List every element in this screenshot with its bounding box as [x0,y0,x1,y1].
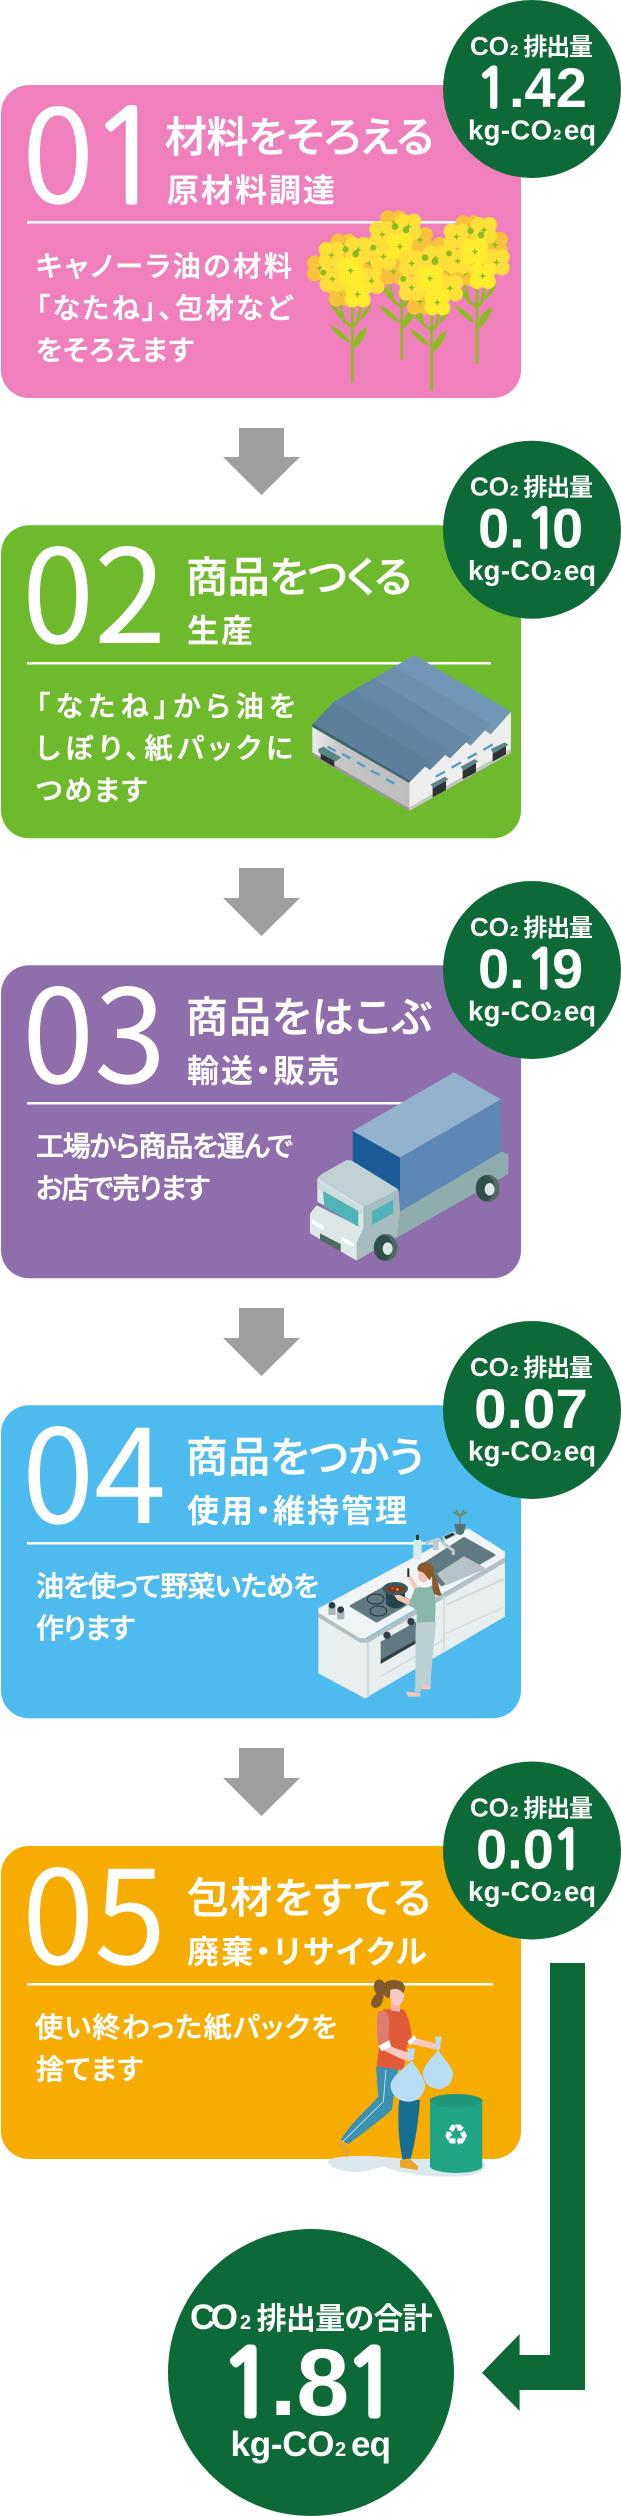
badge: step 05 CO2: CO [470,1792,509,1822]
text block: step 01: キャノーラ油の材料 [36,245,292,285]
heading: step 03: 商品をはこぶ [186,984,432,1045]
badge: step 04 CO2: 0.07 [474,1377,588,1440]
arrow: step 1 to 2 [223,428,300,495]
badge: step 02 CO2: CO [470,472,509,502]
badge: step 04 CO2: CO [470,1352,509,1382]
badge: step 03 CO2 [443,881,621,1059]
text block: step 04 [36,1565,319,1647]
number 01: 1 [88,92,167,222]
icon: factory [312,655,511,811]
total label: 2 [240,2312,251,2334]
icon: canola flowers [307,210,510,391]
badge: step 03 CO2: 1 [526,943,558,996]
number 04: 04 [22,1373,166,1561]
icon: woman with trash bags and recycling bin: ♻ [443,2118,469,2152]
text block: step 04: 作ります [36,1607,135,1647]
text block: step 05 [35,2006,337,2088]
panel: step 01 materials [1,53,521,398]
subheading: step 05: 廃棄・リサイクル [187,1927,427,1973]
number 01: 0 [22,53,94,241]
badge: step 03 CO2: kg-CO [468,995,552,1026]
text block: step 03: お店で売ります [36,1167,210,1207]
badge: step 03 CO2: CO [470,912,509,942]
badge: step 02 CO2: 0 [552,497,583,560]
total label: CO [190,2298,238,2337]
total unit: eq [351,2425,391,2464]
subheading: step 02: 生産 [187,606,253,652]
text block: step 02: つめます [36,769,147,809]
text block: step 03: 工場から商品を運んで [36,1125,293,1165]
badge: step 03 CO2: 0. [478,937,525,1000]
heading: step 04: 商品をつかう [186,1424,424,1485]
badge: step 01 CO2: eq [564,114,596,145]
badge: step 02 CO2: 0. [478,497,525,560]
subheading: step 04: 使用・維持管理 [187,1486,407,1532]
subheading: step 01: 原材料調達 [167,166,335,212]
badge: step 04 CO2 [443,1321,621,1499]
panel: step 03 transport [1,933,521,1278]
number 02: 02 [22,493,166,681]
badge: step 02 CO2: 排出量 [524,468,593,503]
text block: step 05: 使い終わった紙パックを [35,2006,337,2046]
total unit: 2 [335,2439,346,2461]
badge: step 02 CO2: eq [564,555,596,586]
total label: 排出量の合計 [257,2294,433,2338]
text block: step 01: 「なたね」、包材など [36,287,294,327]
total value: .8 [270,2330,349,2436]
badge: step 02 CO2: 2 [553,567,561,584]
badge: step 02 CO2: kg-CO [468,555,552,586]
badge: step 03 CO2: 2 [553,1007,561,1024]
text block: step 02: しぼり、紙パックに [36,727,293,767]
badge: step 02 CO2 [443,441,621,619]
icon: kitchen with cook [318,1510,505,1698]
heading: step 02: 商品をつくる [186,544,412,605]
badge: step 05 CO2: 0.0 [476,1818,554,1880]
badge: step 05 CO2: kg-CO [468,1876,552,1907]
arrow: step 3 to 4 [223,1308,300,1376]
icon: truck [310,1072,508,1261]
badge: step 03 CO2: 2 [510,923,518,940]
subheading: step 03: 輸送・販売 [187,1046,339,1092]
heading: step 05: 包材をすてる [187,1865,431,1926]
badge: step 05 CO2 [443,1762,621,1940]
panel: step 05 disposal [1,1814,521,2177]
badge: step 03 CO2: eq [564,995,596,1026]
badge: step 02 CO2: 2 [510,483,518,500]
badge: step 01 CO2: .42 [509,56,587,119]
total unit: kg-CO [230,2425,334,2464]
arrow: step 4 to 5 [223,1748,300,1816]
badge: step 01 CO2: kg-CO [468,114,552,145]
arrow: to total [482,1963,585,2411]
badge: step 05 CO2: eq [564,1876,596,1907]
badge: step 04 CO2: eq [564,1435,596,1466]
text block: step 04: 油を使って野菜いためを [36,1565,319,1605]
badge: step 05 CO2: 排出量 [524,1788,593,1824]
badge: step 01 CO2: 排出量 [524,27,593,62]
text block: step 01 [36,245,294,369]
total value: 1 [220,2338,275,2429]
text block: step 01: をそろえます [36,329,194,369]
badge: step 04 CO2: 2 [553,1447,561,1464]
badge: step 05 CO2: 2 [510,1804,518,1820]
badge: step 01 CO2: 1 [476,62,508,115]
badge: step 01 CO2: 2 [553,126,561,143]
badge: step 01 CO2 [443,0,621,178]
badge: step 04 CO2: 排出量 [524,1348,593,1383]
number 05: 05 [22,1814,166,2002]
badge: step 04 CO2: kg-CO [468,1435,552,1466]
text block: step 02: 「なたね」から油を [36,685,295,725]
panel: step 04 use [1,1373,521,1718]
text block: step 05: 捨てます [36,2048,143,2088]
badge: step 03 CO2: 排出量 [524,908,593,943]
badge: step 05 CO2: 2 [553,1888,561,1905]
badge: step 05 CO2: 1 [552,1824,584,1876]
panel: step 02 production [1,493,521,838]
badge: step 02 CO2: 1 [526,503,558,556]
badge: step 01 CO2: CO [470,31,509,61]
total value: 1 [344,2338,399,2429]
badge: step 03 CO2: 9 [552,937,583,1000]
badge: total CO2 [168,2229,454,2516]
text block: step 02 [36,685,295,809]
icon: woman with trash bags and recycling bin [328,1979,485,2177]
arrow: step 2 to 3 [223,868,300,936]
heading: step 01: 材料をそろえる [165,104,434,165]
badge: step 04 CO2: 2 [510,1363,518,1380]
text block: step 03 [36,1125,293,1207]
number 03: 03 [22,933,166,1121]
badge: step 01 CO2: 2 [510,42,518,59]
